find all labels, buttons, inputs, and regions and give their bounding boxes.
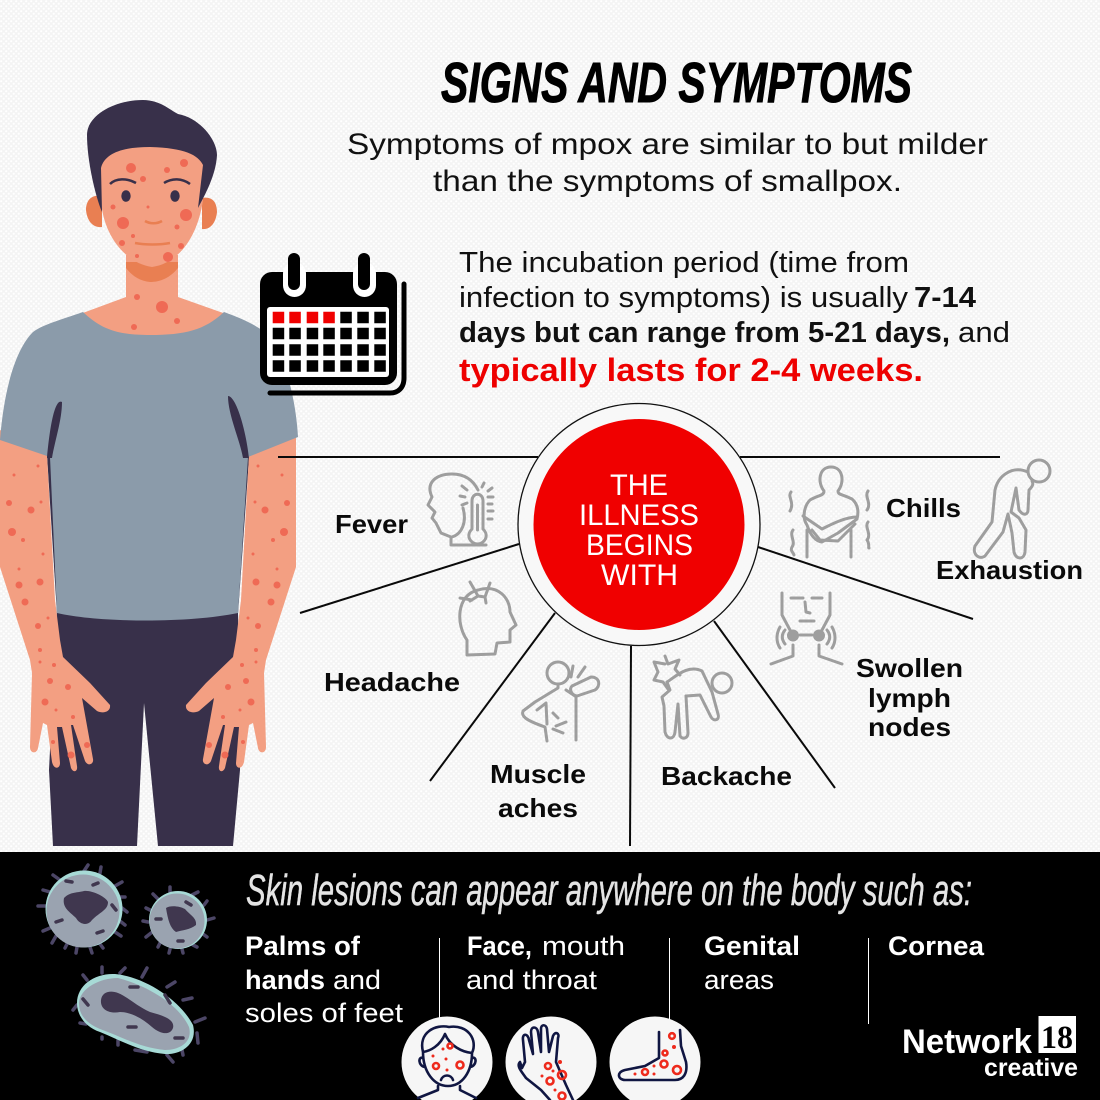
logo: Network18 creative: creative	[984, 1054, 1078, 1082]
column: genital areas	[704, 931, 800, 995]
incubation period text: typically lasts for 2-4 weeks.	[459, 352, 923, 388]
trousers	[49, 610, 240, 846]
t-shirt	[0, 312, 298, 620]
incubation period text: and	[958, 317, 1010, 349]
icon: face and neck nodes	[771, 593, 842, 664]
icon: face with rash	[402, 1016, 492, 1100]
intro text: than the symptoms of smallpox.	[433, 165, 902, 198]
column: face, mouth and throat: Face,	[467, 931, 532, 961]
symptom: backache: Backache	[661, 761, 792, 791]
left arm and hand	[0, 430, 110, 771]
column: genital areas: Genital	[704, 931, 800, 961]
logo: Network18 creative	[902, 1016, 1078, 1082]
ears	[86, 196, 217, 229]
symptom: muscle aches: aches	[498, 793, 578, 823]
neck shadow	[126, 262, 178, 282]
title: SIGNS AND SYMPTOMS	[441, 51, 912, 115]
column: cornea: Cornea	[888, 931, 985, 961]
symptom: backache	[654, 656, 792, 791]
connector lines	[278, 457, 1000, 846]
incubation period text: days but can range from 5-21 days,	[459, 317, 950, 349]
hair	[87, 100, 217, 212]
symptom: headache: Headache	[324, 667, 460, 697]
icon: shivering figure	[790, 467, 869, 557]
icon: foot with rash	[610, 1016, 700, 1100]
column: face, mouth and throat: and throat	[466, 965, 598, 995]
bottom panel: skin lesions	[0, 852, 1100, 1100]
symptom: chills: Chills	[886, 493, 961, 523]
symptom: exhaustion	[936, 460, 1083, 585]
symptom: swollen lymph nodes: Swollen	[856, 653, 963, 683]
symptom: chills	[790, 467, 961, 557]
central circle: the illness begins with: BEGINS	[586, 529, 693, 562]
icon: body with aching muscle	[523, 662, 599, 741]
shirt fold marks	[47, 396, 249, 458]
right arm and hand	[186, 430, 296, 771]
logo: Network18 creative: 18	[1041, 1020, 1073, 1056]
icon: hand with rash	[506, 1016, 596, 1100]
column: genital areas: areas	[704, 965, 774, 995]
symptom: muscle aches	[490, 662, 599, 823]
intro text	[347, 128, 988, 198]
logo: Network18 creative: Network	[902, 1023, 1032, 1061]
column: face, mouth and throat: mouth	[542, 931, 625, 961]
central circle: the illness begins with: ILLNESS	[579, 499, 699, 532]
incubation period text: 7-14	[914, 282, 976, 314]
incubation period text: infection to symptoms) is usually	[459, 282, 909, 314]
icon: head with cracks	[460, 582, 516, 655]
column: palms and soles: hands	[245, 965, 325, 995]
symptom: headache	[324, 582, 516, 697]
central circle: the illness begins with: WITH	[601, 559, 678, 592]
central circle: the illness begins with: THE	[610, 469, 668, 502]
symptom: fever	[335, 474, 493, 545]
symptom: muscle aches: Muscle	[490, 759, 586, 789]
symptom: swollen lymph nodes	[771, 593, 963, 742]
symptom: swollen lymph nodes: nodes	[868, 712, 951, 742]
icon: bent figure with pain star	[654, 656, 732, 738]
column: palms and soles	[245, 931, 404, 1028]
icon: calendar	[260, 253, 404, 393]
person illustration with rash	[0, 100, 298, 846]
shirt side folds	[47, 396, 249, 614]
icon: exhausted figure	[974, 460, 1050, 558]
symptom: exhaustion: Exhaustion	[936, 555, 1083, 585]
symptom: fever: Fever	[335, 509, 408, 539]
facial features	[110, 179, 190, 244]
face	[101, 147, 203, 267]
icon: virus cells	[38, 865, 214, 1062]
face and neck rash	[110, 159, 192, 330]
neck and chest	[80, 255, 226, 345]
incubation period text	[459, 247, 1010, 388]
column: face, mouth and throat	[466, 931, 625, 995]
central circle: the illness begins with	[518, 404, 760, 646]
intro text: Symptoms of mpox are similar to but milder	[347, 128, 988, 161]
icon: head with thermometer	[428, 474, 493, 545]
column: palms and soles: soles of feet	[245, 998, 404, 1028]
column: palms and soles: Palms of	[245, 931, 361, 961]
symptom: swollen lymph nodes: lymph	[868, 683, 951, 713]
incubation period text: The incubation period (time from	[459, 247, 909, 279]
column: palms and soles: and	[333, 965, 381, 995]
